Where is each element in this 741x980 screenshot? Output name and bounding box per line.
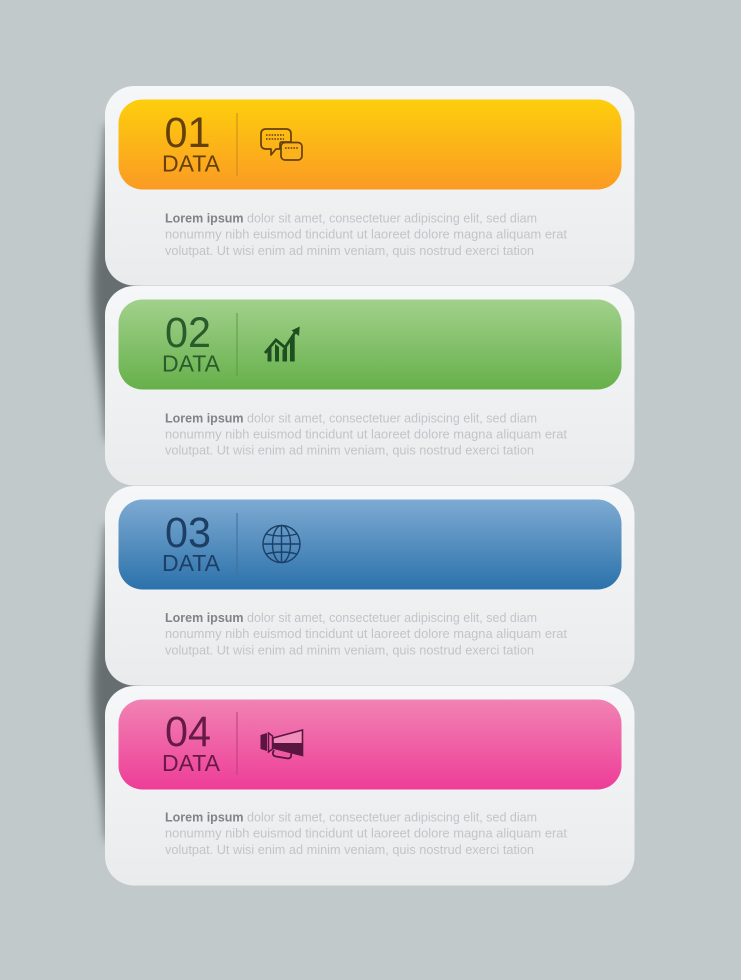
card 1 background bbox=[105, 86, 634, 286]
icon: megaphone bbox=[260, 730, 303, 758]
divider 2 bbox=[236, 313, 238, 376]
label DATA 3: DATA bbox=[162, 550, 220, 576]
band 4 bbox=[118, 700, 622, 790]
icon: chat bubbles bbox=[261, 129, 302, 160]
label DATA 4: DATA bbox=[162, 750, 220, 776]
band 1 bbox=[118, 100, 622, 190]
body text 3: nonummy nibh euismod tincidunt ut laoreet dolore magna aliquam erat bbox=[165, 626, 567, 641]
body text 2: nonummy nibh euismod tincidunt ut laoreet dolore magna aliquam erat bbox=[165, 426, 567, 442]
divider 3 bbox=[236, 513, 238, 575]
body text 2: volutpat. Ut wisi enim ad minim veniam, quis nostrud exerci tation bbox=[165, 442, 534, 458]
body text 3: Lorem ipsum dolor sit amet, consectetuer adipiscing elit, sed diam bbox=[165, 610, 548, 625]
panel 3 bbox=[105, 486, 634, 686]
body text 1: volutpat. Ut wisi enim ad minim veniam, quis nostrud exerci tation bbox=[165, 243, 534, 258]
body text 1: nonummy nibh euismod tincidunt ut laoreet dolore magna aliquam erat bbox=[165, 226, 567, 242]
panel 2 bbox=[105, 286, 634, 486]
icon: growth chart bbox=[265, 326, 300, 362]
number 04: 04 bbox=[165, 708, 211, 756]
divider 4 bbox=[236, 712, 238, 775]
card shadows bbox=[92, 125, 135, 840]
card 3 background bbox=[105, 486, 634, 686]
band 2 bbox=[118, 300, 622, 390]
band 3 bbox=[118, 500, 622, 590]
divider 1 bbox=[236, 113, 238, 176]
body text 2: Lorem ipsum dolor sit amet, consectetuer adipiscing elit, sed diam bbox=[165, 410, 548, 426]
number 02: 02 bbox=[165, 309, 211, 357]
body text 4: Lorem ipsum dolor sit amet, consectetuer adipiscing elit, sed diam bbox=[165, 810, 548, 824]
label DATA 2: DATA bbox=[162, 350, 220, 376]
body text 4: volutpat. Ut wisi enim ad minim veniam, quis nostrud exerci tation bbox=[165, 842, 534, 857]
label DATA 1: DATA bbox=[162, 150, 220, 176]
body text 4: nonummy nibh euismod tincidunt ut laoreet dolore magna aliquam erat bbox=[165, 826, 567, 840]
body text 1: Lorem ipsum dolor sit amet, consectetuer adipiscing elit, sed diam bbox=[165, 210, 548, 226]
number 01: 01 bbox=[164, 109, 210, 157]
icon: globe bbox=[263, 526, 300, 562]
panel 1 bbox=[105, 86, 634, 286]
card 4 background bbox=[105, 686, 634, 886]
body text 3: volutpat. Ut wisi enim ad minim veniam, quis nostrud exerci tation bbox=[165, 642, 534, 658]
card 2 background bbox=[105, 286, 634, 486]
number 03: 03 bbox=[165, 509, 211, 557]
panel 4 bbox=[105, 686, 634, 886]
